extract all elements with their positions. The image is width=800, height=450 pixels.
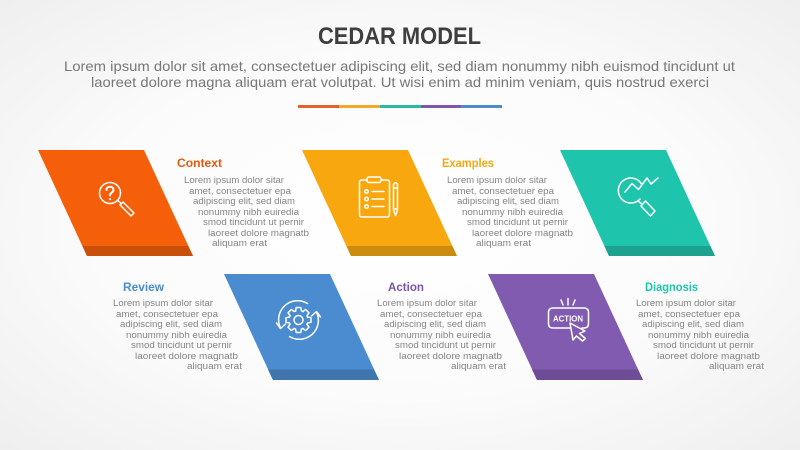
- review body text: Lorem ipsum dolor sitar: [113, 298, 213, 308]
- action heading: Action: [388, 280, 424, 294]
- review body text: aliquam erat: [187, 361, 243, 371]
- context base band: [82, 246, 193, 256]
- panel: context: [38, 150, 309, 256]
- panel: action: [377, 274, 643, 380]
- diagnosis body text: aliquam erat: [709, 361, 765, 371]
- panel: diagnosis shape: [560, 150, 715, 256]
- icon: clipboard and pencil: [360, 177, 398, 217]
- action body text: amet, consectetuer epa: [380, 309, 482, 319]
- review body text: nonummy nibh euiredia: [126, 330, 227, 340]
- context body text: smod tincidunt ut pernir: [203, 217, 304, 227]
- context body text: nonummy nibh euiredia: [198, 207, 299, 217]
- panel: examples: [302, 150, 573, 256]
- action body text: [377, 298, 507, 371]
- icon: magnifier with question mark: [100, 182, 134, 216]
- diagnosis parallelogram: [560, 150, 715, 256]
- icon: action button with cursor: [548, 298, 588, 341]
- colored divider bar: [298, 105, 502, 108]
- examples body text: laoreet dolore magnatb: [472, 228, 573, 238]
- context body text: amet, consectetuer epa: [189, 186, 291, 196]
- examples body text: nonummy nibh euiredia: [462, 207, 563, 217]
- diagnosis body text: adipiscing elit, sed diam: [642, 319, 744, 329]
- review body text: smod tincidunt ut pernir: [131, 340, 232, 350]
- action body text: laoreet dolore magnatb: [399, 351, 502, 361]
- diagnosis body text: amet, consectetuer epa: [638, 309, 740, 319]
- diagnosis heading: Diagnosis: [645, 280, 698, 294]
- diagnosis body text: smod tincidunt ut pernir: [653, 340, 754, 350]
- examples body text: adipiscing elit, sed diam: [457, 196, 559, 206]
- diagnosis base band: [604, 246, 715, 256]
- diagnosis body text: laoreet dolore magnatb: [657, 351, 760, 361]
- subtitle text: Lorem ipsum dolor sit amet, consectetuer adipiscing elit, sed diam nonummy nibh euismod tincidunt ut: [64, 58, 735, 74]
- examples base band: [346, 246, 457, 256]
- review body text: adipiscing elit, sed diam: [120, 319, 222, 329]
- panel: review: [113, 274, 379, 380]
- context body text: Lorem ipsum dolor sitar: [184, 175, 284, 185]
- action body text: Lorem ipsum dolor sitar: [377, 298, 477, 308]
- examples heading: Examples: [442, 156, 494, 170]
- context parallelogram: [38, 150, 193, 256]
- examples body text: smod tincidunt ut pernir: [467, 217, 568, 227]
- context body text: [184, 175, 309, 248]
- context body text: adipiscing elit, sed diam: [193, 196, 295, 206]
- examples body text: amet, consectetuer epa: [452, 186, 554, 196]
- icon: gear with circular arrows: [276, 301, 320, 339]
- examples body text: aliquam erat: [476, 238, 532, 248]
- action body text: adipiscing elit, sed diam: [384, 319, 486, 329]
- review base band: [268, 370, 379, 380]
- review heading: Review: [123, 280, 165, 294]
- review body text: laoreet dolore magnatb: [135, 351, 238, 361]
- context body text: laoreet dolore magnatb: [208, 228, 309, 238]
- review parallelogram: [224, 274, 379, 380]
- review body text: [113, 298, 243, 371]
- action parallelogram: [488, 274, 643, 380]
- action base band: [532, 370, 643, 380]
- diagnosis body text: nonummy nibh euiredia: [648, 330, 749, 340]
- action body text: nonummy nibh euiredia: [390, 330, 491, 340]
- subtitle text: laoreet dolore magna aliquam erat volutpat. Ut wisi enim ad minim veniam, quis nostrud exerci: [91, 74, 709, 90]
- title: CEDAR MODEL: [318, 23, 481, 50]
- diagnosis body text: [636, 298, 765, 371]
- context body text: aliquam erat: [212, 238, 268, 248]
- context heading: Context: [177, 156, 222, 170]
- subtitle text: [64, 58, 735, 90]
- examples parallelogram: [302, 150, 457, 256]
- action body text: smod tincidunt ut pernir: [395, 340, 496, 350]
- action body text: aliquam erat: [451, 361, 507, 371]
- examples body text: [447, 175, 573, 248]
- panel: diagnosis text: [636, 280, 765, 371]
- examples body text: Lorem ipsum dolor sitar: [447, 175, 547, 185]
- review body text: amet, consectetuer epa: [116, 309, 218, 319]
- icon: action button with cursor: ACTION: [553, 314, 583, 324]
- diagnosis body text: Lorem ipsum dolor sitar: [636, 298, 736, 308]
- icon: magnifier with trend line: [618, 178, 658, 216]
